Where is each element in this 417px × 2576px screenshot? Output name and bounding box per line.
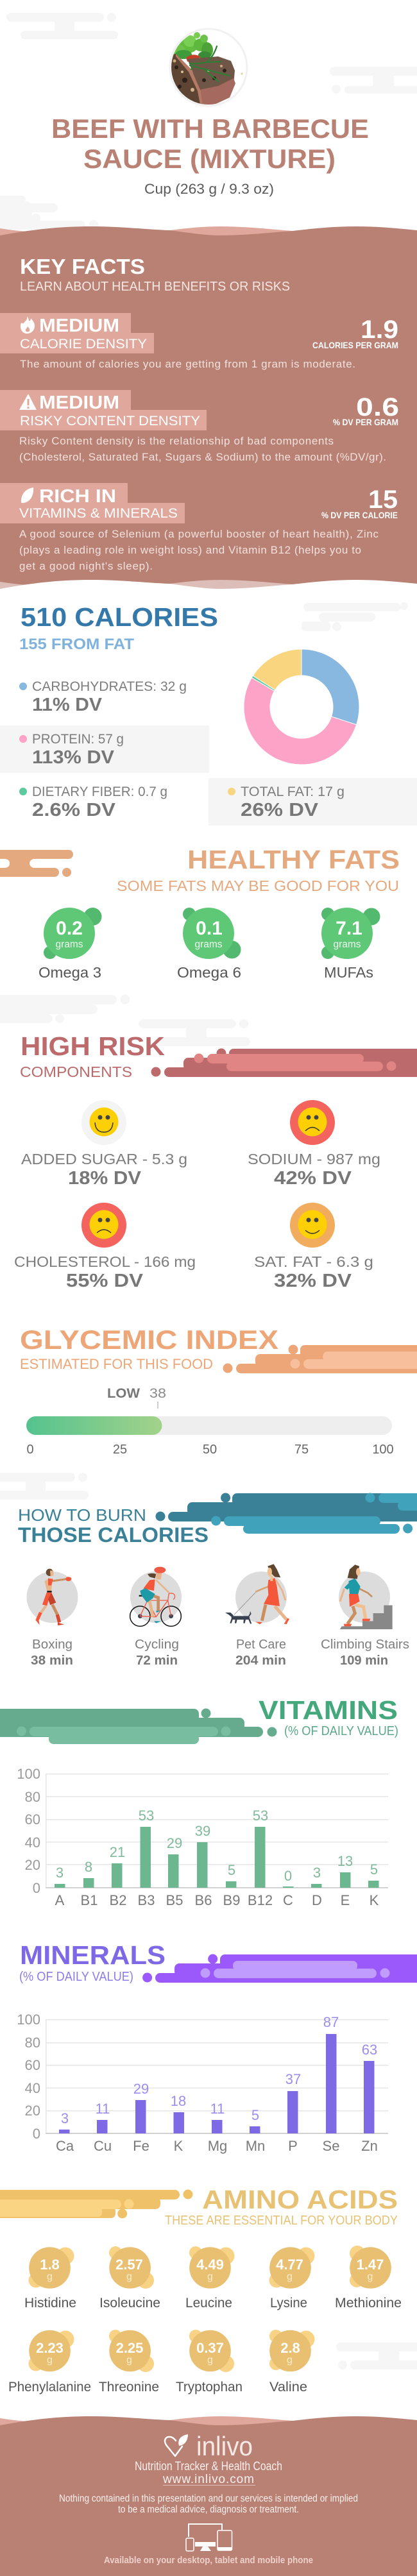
stat: mufas: MUFAs bbox=[324, 964, 373, 981]
tagline: Nutrition Tracker & Health Coach bbox=[135, 2460, 282, 2473]
decoration: burn banner bbox=[155, 1493, 417, 1534]
heading: minerals: (% OF DAILY VALUE) bbox=[19, 1970, 133, 1984]
disclaimer: to be a medical advice, diagnosis or treatment. bbox=[118, 2504, 299, 2515]
heading: key facts: LEARN ABOUT HEALTH BENEFITS OR RISKS bbox=[20, 280, 290, 294]
panel: healthy fats bbox=[0, 845, 400, 981]
decoration: healthy fats banner bbox=[0, 850, 73, 877]
legend: protein: PROTEIN: 57 g bbox=[32, 732, 124, 747]
heading: healthy fats: SOME FATS MAY BE GOOD FOR YOU bbox=[117, 877, 399, 894]
stat: methionine: Methionine bbox=[335, 2296, 402, 2310]
stat: threonine bbox=[99, 2330, 159, 2394]
title: BEEF WITH BARBECUE bbox=[51, 114, 369, 144]
card: risky content density: 0.6 bbox=[356, 393, 399, 421]
card: calorie density: MEDIUM bbox=[39, 316, 119, 336]
decoration: vitamins banner bbox=[0, 1709, 277, 1744]
bar chart: minerals: 60 bbox=[25, 2057, 40, 2073]
bar chart: vitamins: 20 bbox=[25, 1857, 40, 1873]
stat: isoleucine bbox=[99, 2246, 160, 2310]
risk: added sugar: 18% DV bbox=[68, 1168, 142, 1189]
bar chart: vitamins: 40 bbox=[25, 1835, 40, 1851]
bar chart: minerals: P bbox=[288, 2138, 298, 2154]
activity: pet care: 204 min bbox=[235, 1654, 286, 1668]
stat: omega 3: 0.2 bbox=[56, 918, 83, 939]
bar chart: vitamins: D bbox=[312, 1892, 322, 1908]
card: risky content density: RISKY CONTENT DENSITY bbox=[20, 413, 200, 428]
bar chart: vitamins: 13 bbox=[337, 1853, 353, 1869]
gauge scale: 50 bbox=[203, 1443, 217, 1457]
stat: histidine: Histidine bbox=[24, 2296, 76, 2310]
panel: amino acids bbox=[0, 2185, 402, 2394]
card: calorie density: The amount of calories you are getting from 1 gram is moderate. bbox=[20, 358, 355, 370]
card: risky content density: % DV PER GRAM bbox=[333, 417, 398, 427]
stat: valine: 2.8 bbox=[280, 2340, 300, 2356]
card: rich in vitamins and minerals: A good source of Selenium (a powerful booster of heart health), Zinc bbox=[19, 528, 379, 540]
decoration: amino banner bbox=[0, 2190, 192, 2218]
heading: healthy fats bbox=[117, 845, 400, 894]
bar chart: vitamins: 5 bbox=[228, 1862, 235, 1878]
stat: lysine: g bbox=[287, 2271, 293, 2282]
stat: phenylalanine bbox=[8, 2330, 91, 2394]
availability note: Available on your desktop, tablet and mobile phone bbox=[104, 2555, 313, 2566]
stat: phenylalanine: Phenylalanine bbox=[8, 2380, 91, 2394]
panel: footer bbox=[0, 2416, 417, 2576]
gauge scale: 0 bbox=[26, 1443, 34, 1457]
activity: boxing: 38 min bbox=[31, 1654, 73, 1668]
bar chart: minerals: 11 bbox=[210, 2101, 225, 2117]
bar chart: vitamins: 39 bbox=[195, 1823, 210, 1839]
card: calorie density bbox=[0, 313, 398, 370]
heading: high risk: COMPONENTS bbox=[20, 1063, 132, 1080]
bar chart: vitamins: 21 bbox=[110, 1844, 125, 1860]
stat: histidine bbox=[24, 2247, 76, 2310]
bar chart: vitamins: 0 bbox=[284, 1868, 292, 1884]
icon: steak photo in circle bbox=[170, 29, 247, 106]
bar chart: minerals: 40 bbox=[25, 2080, 40, 2096]
website: www.inlivo.com bbox=[162, 2473, 254, 2486]
heading: vitamins: (% OF DAILY VALUE) bbox=[284, 1724, 398, 1738]
stat: valine: Valine bbox=[269, 2380, 307, 2394]
heading: 510 calories: 155 FROM FAT bbox=[19, 636, 134, 653]
risk: sodium: 42% DV bbox=[274, 1168, 352, 1189]
stat: isoleucine: Isoleucine bbox=[99, 2296, 160, 2310]
legend: carbohydrates: CARBOHYDRATES: 32 g bbox=[32, 679, 187, 694]
legend: dietary fiber: DIETARY FIBER: 0.7 g bbox=[32, 784, 167, 799]
decoration: glycemic banner bbox=[223, 1344, 417, 1373]
bar chart: vitamins: B5 bbox=[166, 1892, 183, 1908]
bar chart: vitamins: B1 bbox=[81, 1892, 98, 1908]
gauge scale: 75 bbox=[294, 1443, 309, 1457]
card: risky content density: Risky Content density is the relationship of bad components bbox=[19, 435, 334, 447]
stat: mufas bbox=[321, 908, 380, 981]
bar chart: minerals: 18 bbox=[171, 2093, 186, 2109]
panel: calories bbox=[0, 602, 417, 826]
risk: cholesterol: CHOLESTEROL - 166 mg bbox=[14, 1253, 196, 1270]
heading: high risk bbox=[20, 1031, 165, 1080]
heading: glycemic index: ESTIMATED FOR THIS FOOD bbox=[20, 1356, 213, 1372]
heading: glycemic index bbox=[20, 1325, 278, 1372]
risk: saturated fat: SAT. FAT - 6.3 g bbox=[254, 1253, 373, 1270]
risk: sodium: SODIUM - 987 mg bbox=[248, 1151, 380, 1167]
bar chart: minerals: 63 bbox=[362, 2042, 377, 2058]
legend: dietary fiber bbox=[19, 784, 167, 820]
decoration: minerals banner bbox=[142, 1954, 417, 1983]
activity: cycling bbox=[130, 1567, 182, 1668]
bar chart: vitamins: C bbox=[283, 1892, 293, 1908]
legend: total fat: 26% DV bbox=[241, 800, 319, 820]
bar chart: minerals: 20 bbox=[25, 2103, 40, 2119]
card: risky content density: MEDIUM bbox=[39, 393, 119, 413]
label: low 38: LOW bbox=[107, 1386, 140, 1401]
card: rich in vitamins and minerals: (plays a leading role in weight loss) and Vitamin B12 (helps you to bbox=[19, 544, 361, 556]
panel: high risk components bbox=[14, 1031, 417, 1291]
card: rich in vitamins and minerals: % DV PER CALORIE bbox=[321, 510, 398, 520]
activity: cycling: Cycling bbox=[135, 1638, 179, 1652]
stat: isoleucine: 2.57 bbox=[115, 2257, 143, 2273]
legend: total fat: TOTAL FAT: 17 g bbox=[241, 784, 345, 799]
stat: phenylalanine: g bbox=[47, 2355, 53, 2366]
card: calorie density: CALORIE DENSITY bbox=[20, 336, 147, 352]
risk: saturated fat bbox=[254, 1203, 373, 1291]
logo: inlivo: inlivo bbox=[196, 2431, 253, 2461]
stat: omega 6: grams bbox=[194, 939, 223, 950]
bar chart: vitamins: 3 bbox=[56, 1865, 64, 1881]
stat: histidine: g bbox=[47, 2271, 53, 2282]
panel: minerals bbox=[17, 1940, 417, 2154]
bar chart: minerals: Ca bbox=[56, 2138, 74, 2154]
card: risky content density: (Cholesterol, Saturated Fat, Sugars & Sodium) to the amount (%DV/gr). bbox=[19, 451, 386, 463]
bar chart: minerals: Mn bbox=[246, 2138, 265, 2154]
stat: lysine bbox=[269, 2247, 314, 2310]
bar chart: minerals: 29 bbox=[133, 2081, 149, 2097]
bar chart: minerals: Cu bbox=[94, 2138, 112, 2154]
icon: warning triangle bbox=[19, 394, 37, 410]
bar chart: minerals: 0 bbox=[33, 2126, 40, 2142]
bar chart: vitamins bbox=[17, 1766, 388, 1908]
stat: leucine: Leucine bbox=[185, 2296, 232, 2310]
bar chart: minerals: Fe bbox=[133, 2138, 149, 2154]
bar chart: vitamins: B3 bbox=[138, 1892, 155, 1908]
stat: isoleucine: g bbox=[126, 2271, 132, 2282]
heading: glycemic index: GLYCEMIC INDEX bbox=[20, 1325, 278, 1355]
bar chart: minerals: 87 bbox=[323, 2014, 339, 2030]
heading: how to burn: THOSE CALORIES bbox=[18, 1523, 208, 1546]
stat: threonine: 2.25 bbox=[116, 2340, 143, 2356]
stat: methionine bbox=[335, 2246, 402, 2310]
bar chart: minerals: Zn bbox=[361, 2138, 378, 2154]
bar chart: vitamins: 53 bbox=[253, 1808, 268, 1824]
activity: boxing: Boxing bbox=[32, 1638, 72, 1652]
bar chart: minerals: 37 bbox=[285, 2071, 301, 2087]
stat: omega 3: Omega 3 bbox=[38, 964, 101, 981]
panel: how to burn those calories bbox=[18, 1493, 417, 1668]
bar chart: vitamins: B9 bbox=[223, 1892, 240, 1908]
activity: climbing stairs: Climbing Stairs bbox=[321, 1638, 409, 1652]
card: calorie density: 1.9 bbox=[361, 316, 398, 344]
heading: how to burn bbox=[18, 1505, 208, 1546]
heading: 510 calories bbox=[19, 602, 218, 653]
gauge bar bbox=[26, 1416, 392, 1435]
label: low 38: 38 bbox=[149, 1386, 166, 1401]
bar chart: vitamins: 5 bbox=[370, 1861, 378, 1877]
bar chart: vitamins: 3 bbox=[313, 1865, 321, 1881]
icon: flame bbox=[21, 316, 35, 334]
stat: omega 3: grams bbox=[55, 939, 83, 950]
stat: omega 6: Omega 6 bbox=[177, 964, 241, 981]
stat: tryptophan: Tryptophan bbox=[176, 2380, 243, 2394]
bar chart: vitamins: A bbox=[55, 1892, 65, 1908]
heading: amino acids bbox=[165, 2185, 398, 2228]
decoration: high risk banner bbox=[151, 1048, 417, 1077]
risk: added sugar: ADDED SUGAR - 5.3 g bbox=[21, 1151, 187, 1167]
stat: tryptophan bbox=[176, 2330, 243, 2394]
risk: added sugar bbox=[21, 1100, 187, 1189]
bar chart: minerals: Se bbox=[323, 2138, 339, 2154]
bar chart: vitamins: E bbox=[341, 1892, 350, 1908]
bar chart: vitamins: 8 bbox=[85, 1859, 92, 1875]
stat: mufas: grams bbox=[333, 939, 361, 950]
bar chart: minerals: Mg bbox=[208, 2138, 227, 2154]
bar chart: vitamins: B2 bbox=[110, 1892, 126, 1908]
gauge scale: 25 bbox=[113, 1443, 127, 1457]
heading: amino acids: THESE ARE ESSENTIAL FOR YOUR BODY bbox=[165, 2214, 398, 2228]
card: calorie density: CALORIES PER GRAM bbox=[312, 340, 398, 350]
heading: 510 calories: 510 CALORIES bbox=[21, 602, 218, 632]
icon: devices bbox=[186, 2524, 232, 2551]
legend: protein: 113% DV bbox=[32, 747, 115, 768]
title: SAUCE (MIXTURE) bbox=[83, 144, 336, 174]
card: rich in vitamins and minerals: RICH IN bbox=[39, 486, 116, 507]
legend: total fat bbox=[208, 778, 417, 826]
bar chart: vitamins: 53 bbox=[139, 1808, 154, 1824]
bar chart: vitamins: 0 bbox=[33, 1880, 40, 1896]
heading: minerals: MINERALS bbox=[20, 1940, 166, 1970]
heading: vitamins bbox=[259, 1695, 398, 1738]
activity: pet care bbox=[225, 1564, 289, 1668]
bar chart: minerals: 100 bbox=[17, 2012, 40, 2028]
stat: leucine bbox=[185, 2246, 235, 2310]
stat: methionine: g bbox=[368, 2271, 373, 2282]
risk: saturated fat: 32% DV bbox=[274, 1271, 352, 1291]
stat: phenylalanine: 2.23 bbox=[36, 2340, 64, 2356]
stat: mufas: 7.1 bbox=[336, 918, 362, 939]
heading: key facts: KEY FACTS bbox=[20, 255, 145, 278]
stat: threonine: Threonine bbox=[99, 2380, 159, 2394]
stat: histidine: 1.8 bbox=[40, 2257, 60, 2273]
heading: healthy fats: HEALTHY FATS bbox=[187, 845, 400, 874]
activity: cycling: 72 min bbox=[136, 1654, 178, 1668]
bar chart: vitamins: 29 bbox=[167, 1835, 182, 1851]
bar chart: minerals bbox=[17, 2012, 388, 2154]
bar chart: vitamins: 100 bbox=[17, 1766, 40, 1782]
gauge scale: 100 bbox=[372, 1443, 394, 1457]
stat: tryptophan: g bbox=[207, 2355, 213, 2366]
panel: key facts bbox=[0, 226, 417, 597]
bar chart: vitamins: 80 bbox=[25, 1789, 40, 1805]
bar chart: vitamins: 60 bbox=[25, 1811, 40, 1827]
bar chart: minerals: 80 bbox=[25, 2035, 40, 2051]
heading: amino acids: AMINO ACIDS bbox=[202, 2185, 398, 2214]
stat: omega 6: 0.1 bbox=[196, 918, 223, 939]
stat: methionine: 1.47 bbox=[357, 2257, 384, 2273]
panel: glycemic index bbox=[20, 1325, 417, 1457]
logo: inlivo bbox=[165, 2431, 253, 2461]
disclaimer: Nothing contained in this presentation and our services is intended or implied bbox=[59, 2493, 358, 2504]
card: rich in vitamins and minerals: 15 bbox=[368, 486, 398, 514]
bar chart: vitamins: K bbox=[370, 1892, 379, 1908]
bar chart: minerals: 11 bbox=[96, 2101, 110, 2117]
icon: leaf bbox=[21, 487, 33, 503]
legend: dietary fiber: 2.6% DV bbox=[32, 800, 116, 820]
activity: climbing stairs bbox=[321, 1564, 409, 1668]
donut chart bbox=[244, 649, 359, 765]
stat: valine: g bbox=[287, 2355, 293, 2366]
heading: high risk: HIGH RISK bbox=[21, 1031, 165, 1061]
legend: protein bbox=[0, 725, 209, 773]
bar chart: minerals: 3 bbox=[61, 2110, 69, 2126]
card: rich in vitamins and minerals: VITAMINS & MINERALS bbox=[19, 505, 178, 521]
card: risky content density bbox=[0, 390, 399, 463]
bar chart: minerals: 5 bbox=[251, 2107, 259, 2123]
stat: leucine: g bbox=[207, 2271, 213, 2282]
bar chart: vitamins: B12 bbox=[248, 1892, 273, 1908]
stat: omega 6 bbox=[177, 908, 241, 981]
stat: lysine: 4.77 bbox=[276, 2257, 303, 2273]
bar chart: minerals: K bbox=[174, 2138, 183, 2154]
stat: leucine: 4.49 bbox=[196, 2257, 224, 2273]
stat: lysine: Lysine bbox=[270, 2296, 307, 2310]
risk: cholesterol: 55% DV bbox=[66, 1271, 144, 1291]
activity: pet care: Pet Care bbox=[236, 1638, 286, 1652]
legend: carbohydrates bbox=[19, 679, 187, 715]
legend: carbohydrates: 11% DV bbox=[32, 695, 103, 715]
label: low 38 bbox=[107, 1386, 166, 1409]
heading: key facts bbox=[20, 255, 290, 294]
stat: threonine: g bbox=[126, 2355, 132, 2366]
activity: boxing bbox=[27, 1569, 78, 1668]
heading: how to burn: HOW TO BURN bbox=[18, 1505, 146, 1525]
risk: sodium bbox=[248, 1100, 380, 1189]
serving size: Cup (263 g / 9.3 oz) bbox=[144, 181, 274, 197]
activity: climbing stairs: 109 min bbox=[340, 1654, 388, 1668]
bar chart: vitamins: B6 bbox=[195, 1892, 212, 1908]
card: rich in vitamins and minerals: get a good night's sleep). bbox=[19, 560, 153, 572]
card: rich in vitamins and minerals bbox=[0, 483, 398, 572]
heading: minerals bbox=[19, 1940, 166, 1984]
title bbox=[51, 114, 369, 174]
stat: valine bbox=[269, 2330, 314, 2394]
gauge scale bbox=[26, 1443, 394, 1457]
risk: cholesterol bbox=[14, 1203, 196, 1291]
stat: omega 3 bbox=[38, 908, 101, 981]
disclaimer bbox=[59, 2493, 358, 2515]
heading: vitamins: VITAMINS bbox=[259, 1695, 398, 1725]
panel: vitamins bbox=[0, 1695, 398, 1908]
stat: tryptophan: 0.37 bbox=[196, 2340, 224, 2356]
